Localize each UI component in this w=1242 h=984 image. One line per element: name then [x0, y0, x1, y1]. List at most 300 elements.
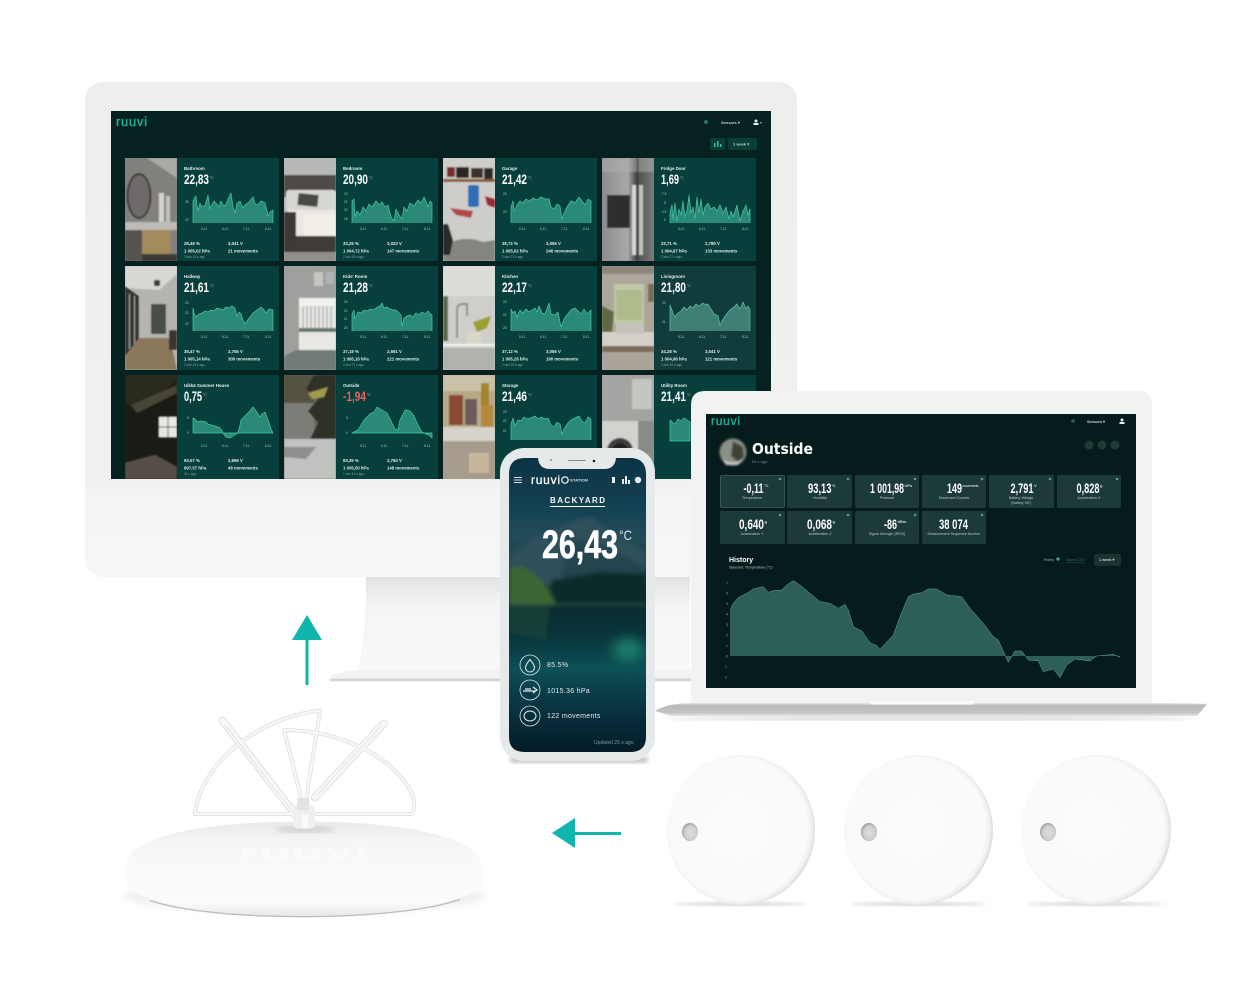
- tile: Humidity: Humidity: [813, 496, 827, 500]
- sensor card: Uikkä Summer House: [125, 375, 279, 479]
- top navigation: 1 week ▾: [733, 142, 750, 146]
- chart: Kitchen: 8.11.: [583, 335, 590, 339]
- sensor card: Garage: Garage: [502, 166, 518, 171]
- chart: Kitchen: 22: [503, 313, 507, 317]
- photo: utility room: [602, 375, 654, 465]
- chart: Storage: 21: [503, 429, 507, 433]
- history area chart: 4: [726, 613, 728, 617]
- chart: Bedroom: 6.11.: [381, 227, 388, 231]
- chart: Uikkä Summer House: 0: [187, 431, 189, 435]
- monitor screen: [111, 111, 771, 479]
- sensor card: Livingroom: °C: [687, 284, 691, 288]
- chart: Storage: [503, 410, 592, 442]
- tile: Movement Counter: [922, 475, 986, 508]
- chart: Fridge Door: 0: [664, 218, 666, 222]
- sensor card: Outside: 1 min 41 s ago: [343, 472, 364, 476]
- phone temperature: 26,43: [542, 523, 618, 567]
- tile: Acceleration X: g: [1100, 483, 1103, 488]
- gateway: [123, 711, 487, 917]
- sensor card: Fridge Door: 2 min 27 s ago: [661, 255, 682, 259]
- history area chart: -1: [724, 665, 727, 669]
- sensor card: Bedroom: 2 min 29 s ago: [343, 255, 364, 259]
- laptop screen: [706, 414, 1136, 688]
- sensor card: Bathroom: [125, 158, 279, 261]
- tile: Acceleration X: Acceleration X: [1077, 496, 1101, 500]
- chart: Kids' Room: 20: [344, 326, 348, 330]
- chart: Fridge Door: 7.5: [662, 192, 667, 196]
- tile: Acceleration Y: g: [764, 519, 768, 524]
- chart: Uikkä Summer House: 8.11.: [265, 444, 272, 448]
- chart: Utility Room: [670, 418, 690, 441]
- phone metric: humidity: [520, 655, 568, 675]
- tile: Acceleration X: 0,828: [1076, 480, 1100, 496]
- chart: Livingroom: 6.11.: [699, 335, 706, 339]
- top navigation: [704, 120, 762, 150]
- sensor card: Garage: 3,055 V: [546, 241, 561, 246]
- sensor card: Kitchen: [443, 266, 597, 370]
- sensor card: Uikkä Summer House: 997,57 hPa: [184, 466, 207, 470]
- chart: Garage: 5.11.: [519, 227, 526, 231]
- chart: Uikkä Summer House: [187, 407, 273, 448]
- sensor card: Bedroom: 20,90: [343, 171, 368, 187]
- chart: Outside: [346, 407, 432, 448]
- top navigation: ▾: [760, 121, 762, 125]
- phone logo: [531, 473, 589, 487]
- sensor card: Livingroom: 3,041 V: [705, 349, 720, 354]
- laptop round buttons: [1084, 440, 1120, 450]
- sensor card: Kitchen: 37,12 %: [502, 349, 518, 354]
- tile: Acceleration Z: g: [832, 519, 836, 524]
- history area chart: 2: [726, 634, 728, 638]
- sensor card: Hallway: 35,47 %: [184, 349, 200, 354]
- chart: Bathroom: 8.11.: [265, 227, 272, 231]
- chart: Kitchen: 5.11.: [519, 335, 526, 339]
- sensor card: Fridge Door: 1,69: [661, 171, 679, 187]
- sensor card: Uikkä Summer House: 48 movements: [228, 466, 258, 470]
- sensor card: Hallway: [125, 266, 279, 370]
- sensor card: Uikkä Summer House: 0,75: [184, 388, 202, 404]
- chart: Outside: 5.11.: [360, 444, 367, 448]
- chart: Bedroom: 22: [344, 200, 348, 204]
- chart: Garage: 6.11.: [540, 227, 547, 231]
- history area chart: 6: [726, 592, 728, 596]
- tile: Acceleration Y: Acceleration Y: [740, 532, 764, 536]
- chart: Livingroom: 5.11.: [678, 335, 685, 339]
- lake glow: [612, 638, 644, 662]
- arrow: sensors to phone: [552, 818, 621, 848]
- chart: Fridge Door: [662, 192, 751, 231]
- chart: Garage: 8.11.: [583, 227, 590, 231]
- history heading: History: [729, 557, 753, 564]
- tile: Movement Counter: 149: [947, 480, 962, 496]
- history area chart: 1: [726, 644, 728, 648]
- sensor card: Bathroom: 22,83: [184, 171, 209, 187]
- history controls: [1044, 554, 1121, 566]
- photo: fridge: [602, 158, 654, 261]
- tile: Temperature: Temperature: [742, 496, 762, 500]
- monitor stand: [330, 577, 700, 681]
- sensor card: Uikkä Summer House: 93,57 %: [184, 458, 200, 463]
- photo: winter forest: [284, 375, 336, 479]
- sensor card: Livingroom: 1 004,96 hPa: [661, 356, 687, 362]
- gateway embossed logo: ruuvi: [238, 841, 368, 863]
- history area chart: 5: [726, 602, 728, 606]
- tile: Pressure: 1 001,98: [870, 480, 904, 496]
- sensor card: Bedroom: 3,023 V: [387, 241, 402, 246]
- chart: Bathroom: [185, 193, 274, 231]
- sensor card: Uikkä Summer House: °C: [203, 393, 207, 397]
- sensor card: Bathroom: 21 movements: [228, 248, 258, 254]
- chart: Bedroom: 7.11.: [402, 227, 409, 231]
- sensor card: Outside: 148 movements: [387, 466, 420, 470]
- tile: Acceleration Z: Acceleration Z: [809, 532, 832, 536]
- heading: Outside: Outside: [752, 440, 813, 458]
- chart: Kids' Room: [344, 300, 433, 339]
- tile: Signal Strength: dBm: [898, 519, 907, 524]
- sensor card: Livingroom: 2 min 52 s ago: [661, 363, 682, 367]
- sensor card: Bathroom: 2 min 14 s ago: [184, 255, 205, 259]
- chart: Kids' Room: 5.11.: [360, 335, 367, 339]
- tile: Battery Voltage: (Battery OK): [1011, 501, 1031, 505]
- gateway base: [126, 822, 482, 917]
- chart: Livingroom: 21: [662, 320, 666, 324]
- chart: Kids' Room: 24: [344, 300, 348, 304]
- photo: bedroom: [284, 158, 336, 261]
- chart: Outside: 0: [346, 431, 348, 435]
- top navigation: Sensors ▾: [721, 120, 741, 125]
- sensor card: Bathroom: 28,49 %: [184, 241, 200, 246]
- chart: Fridge Door: 5.11.: [678, 227, 685, 231]
- chart: Kids' Room: 21: [344, 317, 348, 321]
- phone metric: pressure: 1015.36 hPa: [547, 688, 590, 695]
- sensor card: Utility Room: 21,41: [661, 388, 686, 404]
- photo: living room: [602, 266, 654, 370]
- chart: Fridge Door: 2.5: [662, 210, 667, 214]
- sensor card: Uikkä Summer House: 2,696 V: [228, 458, 243, 463]
- sensor card: Bathroom: 3,041 V: [228, 241, 243, 246]
- phone heading: BACKYARD: BACKYARD: [550, 496, 605, 505]
- tile: Acceleration Y: [720, 511, 785, 544]
- tile: Acceleration Z: [787, 511, 852, 544]
- phone shadow: [510, 756, 648, 763]
- chart: Storage: 22: [503, 419, 507, 423]
- sensor card: Uikkä Summer House: Uikkä Summer House: [184, 383, 230, 388]
- sensor card: Livingroom: [602, 266, 756, 370]
- photo: bathroom: [125, 158, 177, 261]
- phone: [500, 448, 655, 763]
- photo: garage: [443, 158, 495, 261]
- sensor card: Kids' Room: 37,19 %: [343, 349, 359, 354]
- history area chart: -2: [724, 675, 727, 679]
- chart: Garage: 20: [503, 210, 507, 214]
- history area chart: 7: [726, 581, 728, 585]
- tile: Signal Strength: -86: [884, 516, 897, 532]
- chart: Kids' Room: 22: [344, 309, 348, 313]
- chart: Kids' Room: 7.11.: [402, 335, 409, 339]
- sensor card: Kitchen: °C: [528, 284, 532, 288]
- forest: [548, 572, 646, 606]
- phone screen: [509, 458, 646, 752]
- phone temperature: °C: [619, 527, 632, 543]
- sensor card: Storage: [443, 375, 597, 479]
- sensor card: Garage: 21,42: [502, 171, 527, 187]
- sensor card: Hallway: 21,61: [184, 279, 209, 295]
- sensor tag 2: [844, 755, 993, 906]
- chart: Uikkä Summer House: 6.11.: [222, 444, 229, 448]
- tile: Battery Voltage: Battery Voltage: [1009, 496, 1033, 500]
- chart: Fridge Door: 8.11.: [742, 227, 749, 231]
- sensor card: Fridge Door: 133 movements: [705, 248, 738, 254]
- chart: Hallway: 22: [185, 311, 189, 315]
- sensor card: Outside: Outside: [343, 383, 360, 388]
- chart: Kitchen: 24: [503, 300, 507, 304]
- tile: Signal Strength: [855, 511, 919, 544]
- gateway hub: [293, 798, 315, 828]
- sensor card: Fridge Door: °C: [680, 176, 684, 180]
- hole: [1040, 823, 1056, 841]
- tile: Battery Voltage: [989, 475, 1054, 508]
- sensor card: Livingroom: 121 movements: [705, 356, 738, 362]
- photo: cabin: [125, 375, 177, 479]
- tile: Battery Voltage: 2,791: [1010, 480, 1034, 496]
- chart: Outside: 7.11.: [402, 444, 409, 448]
- chart: Bedroom: 18: [344, 217, 348, 221]
- chart: Kids' Room: 6.11.: [381, 335, 388, 339]
- photo: hallway: [125, 266, 177, 370]
- phone metric: pressure: [520, 680, 590, 700]
- laptop base: [655, 703, 1207, 716]
- phone logo: STATION: [570, 478, 589, 482]
- sensor card: Bathroom: °C: [210, 176, 214, 180]
- sensor card: Storage: 21,46: [502, 388, 527, 404]
- sensor card: Fridge Door: [602, 158, 756, 261]
- chart: Fridge Door: 6.11.: [699, 227, 706, 231]
- tile: Pressure: hPa: [904, 483, 913, 488]
- history controls: 1 week ▾: [1099, 558, 1116, 562]
- chart: Hallway: [185, 301, 274, 339]
- history heading: [729, 557, 773, 570]
- tile: Acceleration Y: 0,640: [739, 516, 764, 532]
- tile: Battery Voltage: V: [1034, 483, 1037, 488]
- chart: Hallway: 23: [185, 301, 189, 305]
- sensor card: Kids' Room: °C: [369, 284, 373, 288]
- sensor card: Hallway: °C: [210, 284, 214, 288]
- chart: Kids' Room: 8.11.: [424, 335, 431, 339]
- hole: [861, 823, 877, 841]
- sensor card: Bedroom: 33,26 %: [343, 241, 359, 246]
- sensor card: Hallway: 2,755 V: [228, 349, 243, 354]
- laptop: [655, 391, 1207, 720]
- chart: Hallway: 8.11.: [265, 335, 272, 339]
- gateway shadow: [123, 880, 487, 913]
- sensor card: Kids' Room: Kids' Room: [343, 274, 367, 279]
- chart: Kitchen: [503, 300, 592, 339]
- sensor card: Bedroom: °C: [369, 176, 373, 180]
- phone menu icon: [514, 478, 522, 482]
- tile: Humidity: 93,13: [808, 480, 832, 496]
- sensor card: Livingroom: Livingroom: [661, 274, 685, 279]
- tile: Signal Strength: Signal Strength (RSSI): [869, 532, 905, 536]
- tile: Measurement Sequence Number: [922, 511, 986, 544]
- chart: Fridge Door: 5: [664, 201, 666, 205]
- sensor card: Garage: 1 005,02 hPa: [502, 248, 528, 254]
- chart: Livingroom: [662, 301, 751, 339]
- chart: Fridge Door: 7.11.: [720, 227, 727, 231]
- chart: Kitchen: 20: [503, 326, 507, 330]
- chart: Hallway: 7.11.: [243, 335, 250, 339]
- chart: Bathroom: 25: [185, 200, 189, 204]
- laptop screen: 54 s ago: [752, 459, 768, 464]
- tile: Temperature: °C: [764, 483, 769, 488]
- sensor card: Bathroom: Bathroom: [184, 166, 205, 171]
- gateway hub shadow: [275, 826, 335, 833]
- sensor card: Kids' Room: 2,661 V: [387, 349, 402, 354]
- sensor card: Bedroom: 147 movements: [387, 248, 420, 254]
- sensor card: Storage: °C: [528, 393, 532, 397]
- history area chart: 0: [726, 655, 728, 659]
- chart: Outside: 6.11.: [381, 444, 388, 448]
- sensor card: Outside: 1 005,50 hPa: [343, 466, 369, 470]
- sensor card: Garage: °C: [528, 176, 532, 180]
- chart: Uikkä Summer House: 5.11.: [201, 444, 208, 448]
- sensor card: Kitchen: Kitchen: [502, 274, 518, 279]
- chart: Kitchen: 7.11.: [561, 335, 568, 339]
- mountains: [509, 517, 646, 585]
- tile: Measurement Sequence Number: Measurement Sequence Number: [928, 532, 981, 536]
- chart: Bedroom: [344, 192, 433, 231]
- phone metric: movements: [520, 706, 601, 726]
- sensor card: Utility Room: °C: [687, 393, 691, 397]
- sensor card: Outside: 2,784 V: [387, 458, 402, 463]
- photo: storage: [443, 375, 495, 479]
- photo: kitchen: [443, 266, 495, 370]
- laptop shadow: [665, 716, 1195, 720]
- arrow: gateway up to monitor: [292, 615, 322, 685]
- phone metric: movements: 122 movements: [547, 713, 601, 720]
- chart: Hallway: 20: [185, 322, 189, 326]
- sensor card: Garage: 246 movements: [546, 248, 579, 254]
- sensor card: Outside: 93,35 %: [343, 458, 359, 463]
- phone toolbar icons: [612, 476, 641, 484]
- laptop navigation: [1071, 418, 1124, 424]
- sensor card: Garage: 36,72 %: [502, 241, 518, 246]
- chart: Livingroom: 7.11.: [720, 335, 727, 339]
- sensor card: Hallway: 2 min 15 s ago: [184, 363, 205, 367]
- laptop lid: [691, 391, 1152, 703]
- chart: Garage: [503, 192, 592, 231]
- phone logo: ruuvi: [531, 473, 560, 487]
- chart: Bedroom: 8.11.: [424, 227, 431, 231]
- sensor card: Kitchen: 22,17: [502, 279, 527, 295]
- sensor card: Bedroom: 1 004,72 hPa: [343, 248, 369, 254]
- chart: Hallway: 6.11.: [222, 335, 229, 339]
- sensor tag 1: [667, 755, 815, 906]
- tile: Measurement Sequence Number: 38 074: [939, 516, 968, 532]
- chart: Bathroom: 5.11.: [201, 227, 208, 231]
- chart: Kitchen: 6.11.: [540, 335, 547, 339]
- chart: Livingroom: 22: [662, 301, 666, 305]
- sensor card: Uikkä Summer House: 41 s ago: [184, 472, 196, 476]
- chart: Outside: 5: [346, 416, 348, 420]
- tile: Temperature: [720, 476, 784, 508]
- chart: Bedroom: 20: [344, 208, 348, 212]
- sensor card: Storage: Storage: [502, 383, 519, 388]
- tile: Pressure: Pressure: [880, 496, 894, 500]
- tile: Acceleration Z: 0,068: [807, 516, 832, 532]
- avatar: [720, 438, 746, 466]
- gateway antennas: [195, 711, 414, 825]
- phone notch details: [550, 459, 595, 462]
- sensor card: Kitchen: 2 min 25 s ago: [502, 363, 523, 367]
- sensor card: Hallway: 300 movements: [228, 356, 261, 362]
- sensor tag 3: [1021, 755, 1171, 906]
- sensor card: Kids' Room: 21,28: [343, 279, 368, 295]
- phone metric: humidity: 85.5%: [547, 662, 568, 669]
- tile: Movement Counter: Movement Counter: [939, 496, 970, 500]
- hole: [682, 823, 698, 841]
- chart: Bathroom: 6.11.: [222, 227, 229, 231]
- history controls: Export CSV: [1066, 558, 1085, 562]
- sensor card: Fridge Door: 33,71 %: [661, 241, 677, 246]
- monitor body: [85, 82, 797, 577]
- sensor card: Bathroom: 1 005,02 hPa: [184, 248, 210, 254]
- logo: ruuvi: ruuvi: [116, 114, 147, 129]
- sensor card: Livingroom: 34,28 %: [661, 349, 677, 354]
- chart: Storage: 23: [503, 410, 507, 414]
- chart: Garage: 7.11.: [561, 227, 568, 231]
- sensor card: Kids' Room: [284, 266, 438, 370]
- chart: Garage: 25: [503, 192, 507, 196]
- sensor card: Fridge Door: 2,780 V: [705, 241, 720, 246]
- sensor card: Fridge Door: Fridge Door: [661, 166, 686, 171]
- sensor card: Utility Room: Utility Room: [661, 383, 687, 388]
- tile: Acceleration X: [1057, 475, 1121, 508]
- sensor card: Livingroom: 21,80: [661, 279, 686, 295]
- sensor card: Kids' Room: 2 min 27 s ago: [343, 363, 364, 367]
- sensor card: Kids' Room: 221 movements: [387, 356, 420, 362]
- sensor card: Hallway: 1 005,14 hPa: [184, 356, 210, 362]
- history heading: Selected: Temperature (°C): [729, 566, 773, 570]
- sensor card: Bedroom: [284, 158, 438, 261]
- history controls: Points: [1044, 558, 1054, 562]
- tile: Movement Counter: movements: [962, 483, 979, 488]
- sensor card: Outside: °C: [367, 393, 371, 397]
- sensor card: Utility Room: [602, 375, 756, 479]
- chart: Uikkä Summer House: 7.11.: [243, 444, 250, 448]
- sensor card: Kitchen: 3,055 V: [546, 349, 561, 354]
- photo: kids room: [284, 266, 336, 370]
- sensor card: Garage: 2 min 27 s ago: [502, 255, 523, 259]
- chart: Hallway: 5.11.: [201, 335, 208, 339]
- sensor card: Kitchen: 1 005,26 hPa: [502, 356, 528, 362]
- phone updated time: Updated 25 s ago: [594, 740, 634, 746]
- history area chart: 3: [726, 623, 728, 627]
- chart: Bedroom: 5.11.: [360, 227, 367, 231]
- chart: Bathroom: 20: [185, 218, 189, 222]
- tile: Pressure: [855, 475, 919, 508]
- chart: Uikkä Summer House: 5: [187, 416, 189, 420]
- sensor card: Outside: [284, 375, 438, 479]
- sensor card: Kids' Room: 1 005,16 hPa: [343, 356, 369, 362]
- monitor: [85, 82, 797, 681]
- logo: ruuvi: ruuvi: [711, 414, 740, 428]
- sensor card: Hallway: Hallway: [184, 274, 201, 279]
- sensor card: Fridge Door: 1 004,87 hPa: [661, 248, 687, 254]
- metric tiles: [720, 475, 1121, 544]
- sensor card: Kitchen: 190 movements: [546, 356, 579, 362]
- history area chart: [724, 581, 1120, 679]
- sensor card: Bedroom: Bedroom: [343, 166, 362, 171]
